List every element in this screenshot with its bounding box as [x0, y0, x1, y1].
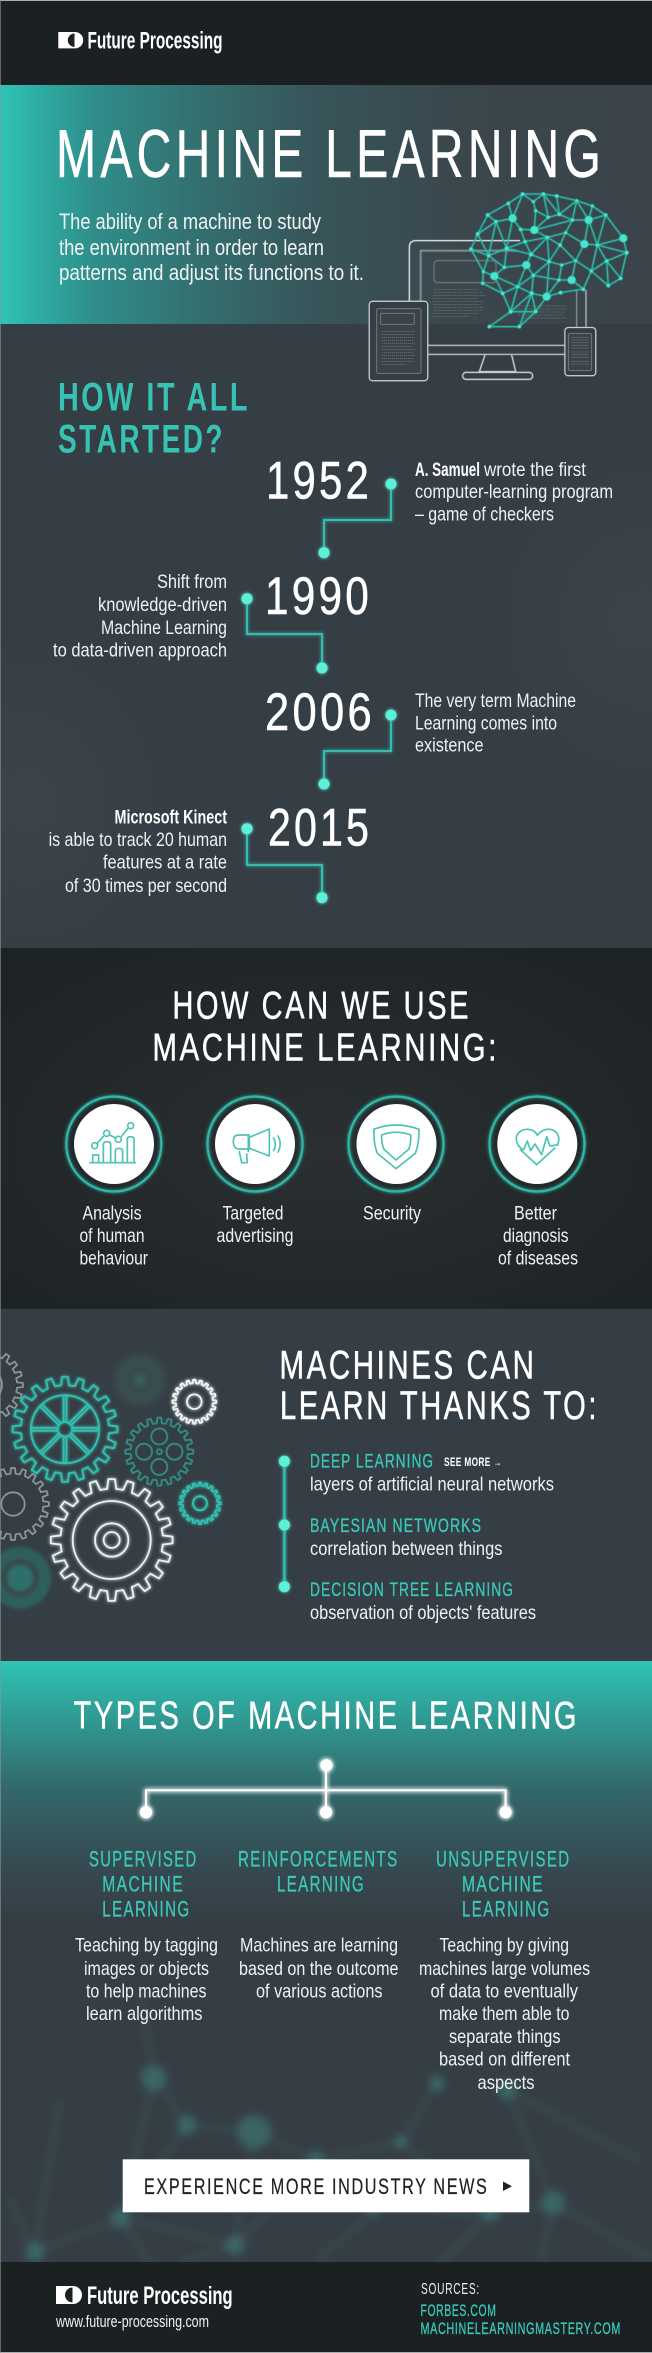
- footer band: [0, 2262, 652, 2352]
- gray gears: [0, 1348, 49, 1540]
- timeline entry: 2015: 2015: [268, 799, 372, 858]
- label: better diagnosis of diseases: [498, 1202, 578, 1270]
- label: targeted advertising: Targeted: [222, 1202, 284, 1224]
- timeline entry: 1990: Shift from: [157, 571, 227, 593]
- column: unsupervised: aspects: [478, 2072, 535, 2094]
- timeline entry: 1990: knowledge-driven: [98, 594, 227, 616]
- column: supervised: SUPERVISED: [89, 1847, 198, 1872]
- tablet text lines: [382, 331, 415, 364]
- column: reinforcements: REINFORCEMENTS: [238, 1847, 398, 1872]
- timeline entry: 2006: Learning comes into: [415, 712, 557, 734]
- teal large gear: [13, 1377, 117, 1482]
- small teal gear: [179, 1483, 221, 1524]
- heading: how can we use machine learning: MACHINE LEARNING:: [152, 1027, 499, 1070]
- column: reinforcements: [238, 1847, 398, 2003]
- intro paragraph: The ability of a machine to study: [59, 209, 321, 234]
- heading: how can we use machine learning: [152, 985, 499, 1070]
- logo: Future Processing: [58, 27, 222, 54]
- icon: neural network brain: [469, 192, 628, 328]
- white discs: [74, 1104, 577, 1184]
- item: bayesian networks: [310, 1515, 503, 1560]
- sources: SOURCES:: [421, 2281, 480, 2298]
- large white gear: [51, 1479, 173, 1601]
- timeline entry: 1952: wrote the first: [483, 459, 586, 481]
- timeline entry: 1952: 1952: [266, 451, 372, 510]
- label: analysis of human behaviour: of human: [80, 1225, 144, 1247]
- timeline entry: 1990: [53, 567, 372, 674]
- timeline entry: 1990: 1990: [265, 567, 372, 626]
- column: supervised: to help machines: [86, 1981, 207, 2003]
- icon: tablet: [369, 301, 428, 381]
- item: decision tree learning: observation of objects' features: [310, 1602, 536, 1624]
- footer logo: [56, 2282, 233, 2310]
- item: decision tree learning: DECISION TREE LEARNING: [310, 1579, 514, 1601]
- timeline section background: [0, 324, 652, 970]
- label: targeted advertising: advertising: [216, 1225, 294, 1247]
- column: unsupervised: separate things: [449, 2026, 561, 2048]
- item: bayesian networks: correlation between things: [310, 1538, 503, 1560]
- timeline entry: 1952: A. Samuel: [415, 459, 480, 481]
- header band: [0, 0, 652, 85]
- label: security: Security: [363, 1202, 421, 1224]
- timeline entry: 1952: – game of checkers: [415, 504, 554, 526]
- timeline entry: 2006: existence: [415, 735, 484, 757]
- column: supervised: [75, 1847, 218, 2025]
- item: deep learning: layers of artificial neural networks: [310, 1474, 554, 1496]
- blurred network background: [10, 1990, 652, 2262]
- icon: phone: [565, 328, 596, 376]
- column: supervised: learn algorithms: [86, 2003, 203, 2025]
- column: unsupervised: of data to eventually: [430, 1981, 578, 2003]
- column: reinforcements: based on the outcome: [239, 1958, 398, 1980]
- intro paragraph: [59, 209, 364, 285]
- column: unsupervised: make them able to: [439, 2003, 570, 2025]
- rings: [66, 1096, 585, 1192]
- item: deep learning: SEE MORE →: [444, 1455, 502, 1469]
- item: bayesian networks: BAYESIAN NETWORKS: [310, 1515, 482, 1537]
- icon: megaphone: [233, 1129, 280, 1163]
- column: supervised: LEARNING: [102, 1897, 190, 1922]
- timeline entry: 2015: Microsoft Kinect: [114, 807, 227, 829]
- heading: how it all started: HOW IT ALL: [58, 376, 250, 420]
- column: unsupervised: based on different: [439, 2049, 570, 2071]
- column: supervised: images or objects: [84, 1958, 209, 1980]
- item: decision tree learning: [310, 1579, 536, 1624]
- timeline entry: 2015: features at a rate: [103, 852, 227, 874]
- column: reinforcements: Machines are learning: [240, 1935, 398, 1957]
- heading: how can we use machine learning: HOW CAN WE USE: [172, 985, 471, 1028]
- heading: machines can learn thanks to: [280, 1343, 599, 1428]
- label: better diagnosis of diseases: Better: [514, 1202, 557, 1224]
- panel: types of machine learning: [0, 1661, 652, 2262]
- column: unsupervised: Teaching by giving: [440, 1935, 569, 1957]
- footer logo: Future Processing: [87, 2282, 233, 2310]
- button: experience more industry news: [123, 2159, 529, 2212]
- heading: how it all started: STARTED?: [58, 418, 225, 462]
- column: supervised: Teaching by tagging: [75, 1935, 218, 1957]
- phone text lines: [571, 337, 589, 364]
- illustration: devices and neural brain: [369, 192, 628, 381]
- icon: shield: [374, 1125, 419, 1169]
- timeline entry: 1990: Machine Learning: [101, 617, 227, 639]
- timeline entry: 2006: The very term Machine: [415, 690, 576, 712]
- label: better diagnosis of diseases: of diseases: [498, 1248, 578, 1270]
- item: deep learning: DEEP LEARNING: [310, 1451, 434, 1473]
- connector 1952: [318, 478, 396, 558]
- timeline entry: 2015: is able to track 20 human: [49, 829, 227, 851]
- icon: heart with pulse: [516, 1129, 559, 1165]
- small white gear: [172, 1380, 216, 1424]
- website url: www.future-processing.com: [55, 2313, 209, 2331]
- dim teal gear: [125, 1418, 193, 1486]
- connector 2006: [318, 710, 396, 790]
- timeline entry: 2006: [265, 683, 576, 790]
- column: reinforcements: LEARNING: [277, 1872, 365, 1897]
- sources: [420, 2281, 621, 2338]
- monitor text lines: [433, 289, 567, 318]
- timeline entry: 1952: computer-learning program: [415, 481, 613, 503]
- column: unsupervised: [419, 1847, 590, 2094]
- column: reinforcements: of various actions: [256, 1981, 383, 2003]
- column: supervised: MACHINE: [102, 1872, 184, 1897]
- column: unsupervised: machines large volumes: [419, 1958, 590, 1980]
- connector 2015: [242, 823, 328, 903]
- column: unsupervised: LEARNING: [462, 1897, 550, 1922]
- timeline entry: 1952: [266, 451, 613, 558]
- timeline: [49, 451, 613, 903]
- column: unsupervised: MACHINE: [462, 1872, 544, 1897]
- logo: Future Processing: Future Processing: [88, 27, 222, 54]
- label: targeted advertising: [216, 1202, 294, 1247]
- label: analysis of human behaviour: [80, 1202, 148, 1270]
- timeline entry: 2015: [49, 799, 372, 903]
- column: unsupervised: UNSUPERVISED: [436, 1847, 570, 1872]
- connector 1990: [242, 593, 328, 674]
- timeline entry: 2015: of 30 times per second: [65, 875, 227, 897]
- gears illustration: [0, 1348, 221, 1609]
- icon: monitor: [409, 241, 586, 379]
- item: deep learning: [310, 1451, 554, 1496]
- button: experience more industry news: EXPERIENCE MORE INDUSTRY NEWS: [144, 2174, 488, 2199]
- panel: machines can learn: [0, 1309, 652, 1661]
- list timeline: [279, 1456, 290, 1592]
- intro paragraph: the environment in order to learn: [59, 235, 324, 260]
- label: better diagnosis of diseases: diagnosis: [503, 1225, 569, 1247]
- heading: machines can learn thanks to: MACHINES CAN: [280, 1343, 536, 1387]
- tree diagram: [140, 1759, 512, 1818]
- heading: how it all started: [58, 376, 250, 462]
- blurred gears: [0, 1356, 164, 1609]
- timeline entry: 1990: to data-driven approach: [53, 640, 227, 662]
- label: analysis of human behaviour: behaviour: [80, 1248, 148, 1270]
- timeline entry: 2006: 2006: [265, 683, 375, 742]
- label: analysis of human behaviour: Analysis: [82, 1202, 142, 1224]
- hero band: [0, 85, 652, 324]
- intro paragraph: patterns and adjust its functions to it.: [59, 260, 364, 285]
- sources: FORBES.COM: [420, 2301, 496, 2320]
- icon: analytics chart: [89, 1123, 136, 1163]
- panel: how can we use: [0, 948, 652, 1309]
